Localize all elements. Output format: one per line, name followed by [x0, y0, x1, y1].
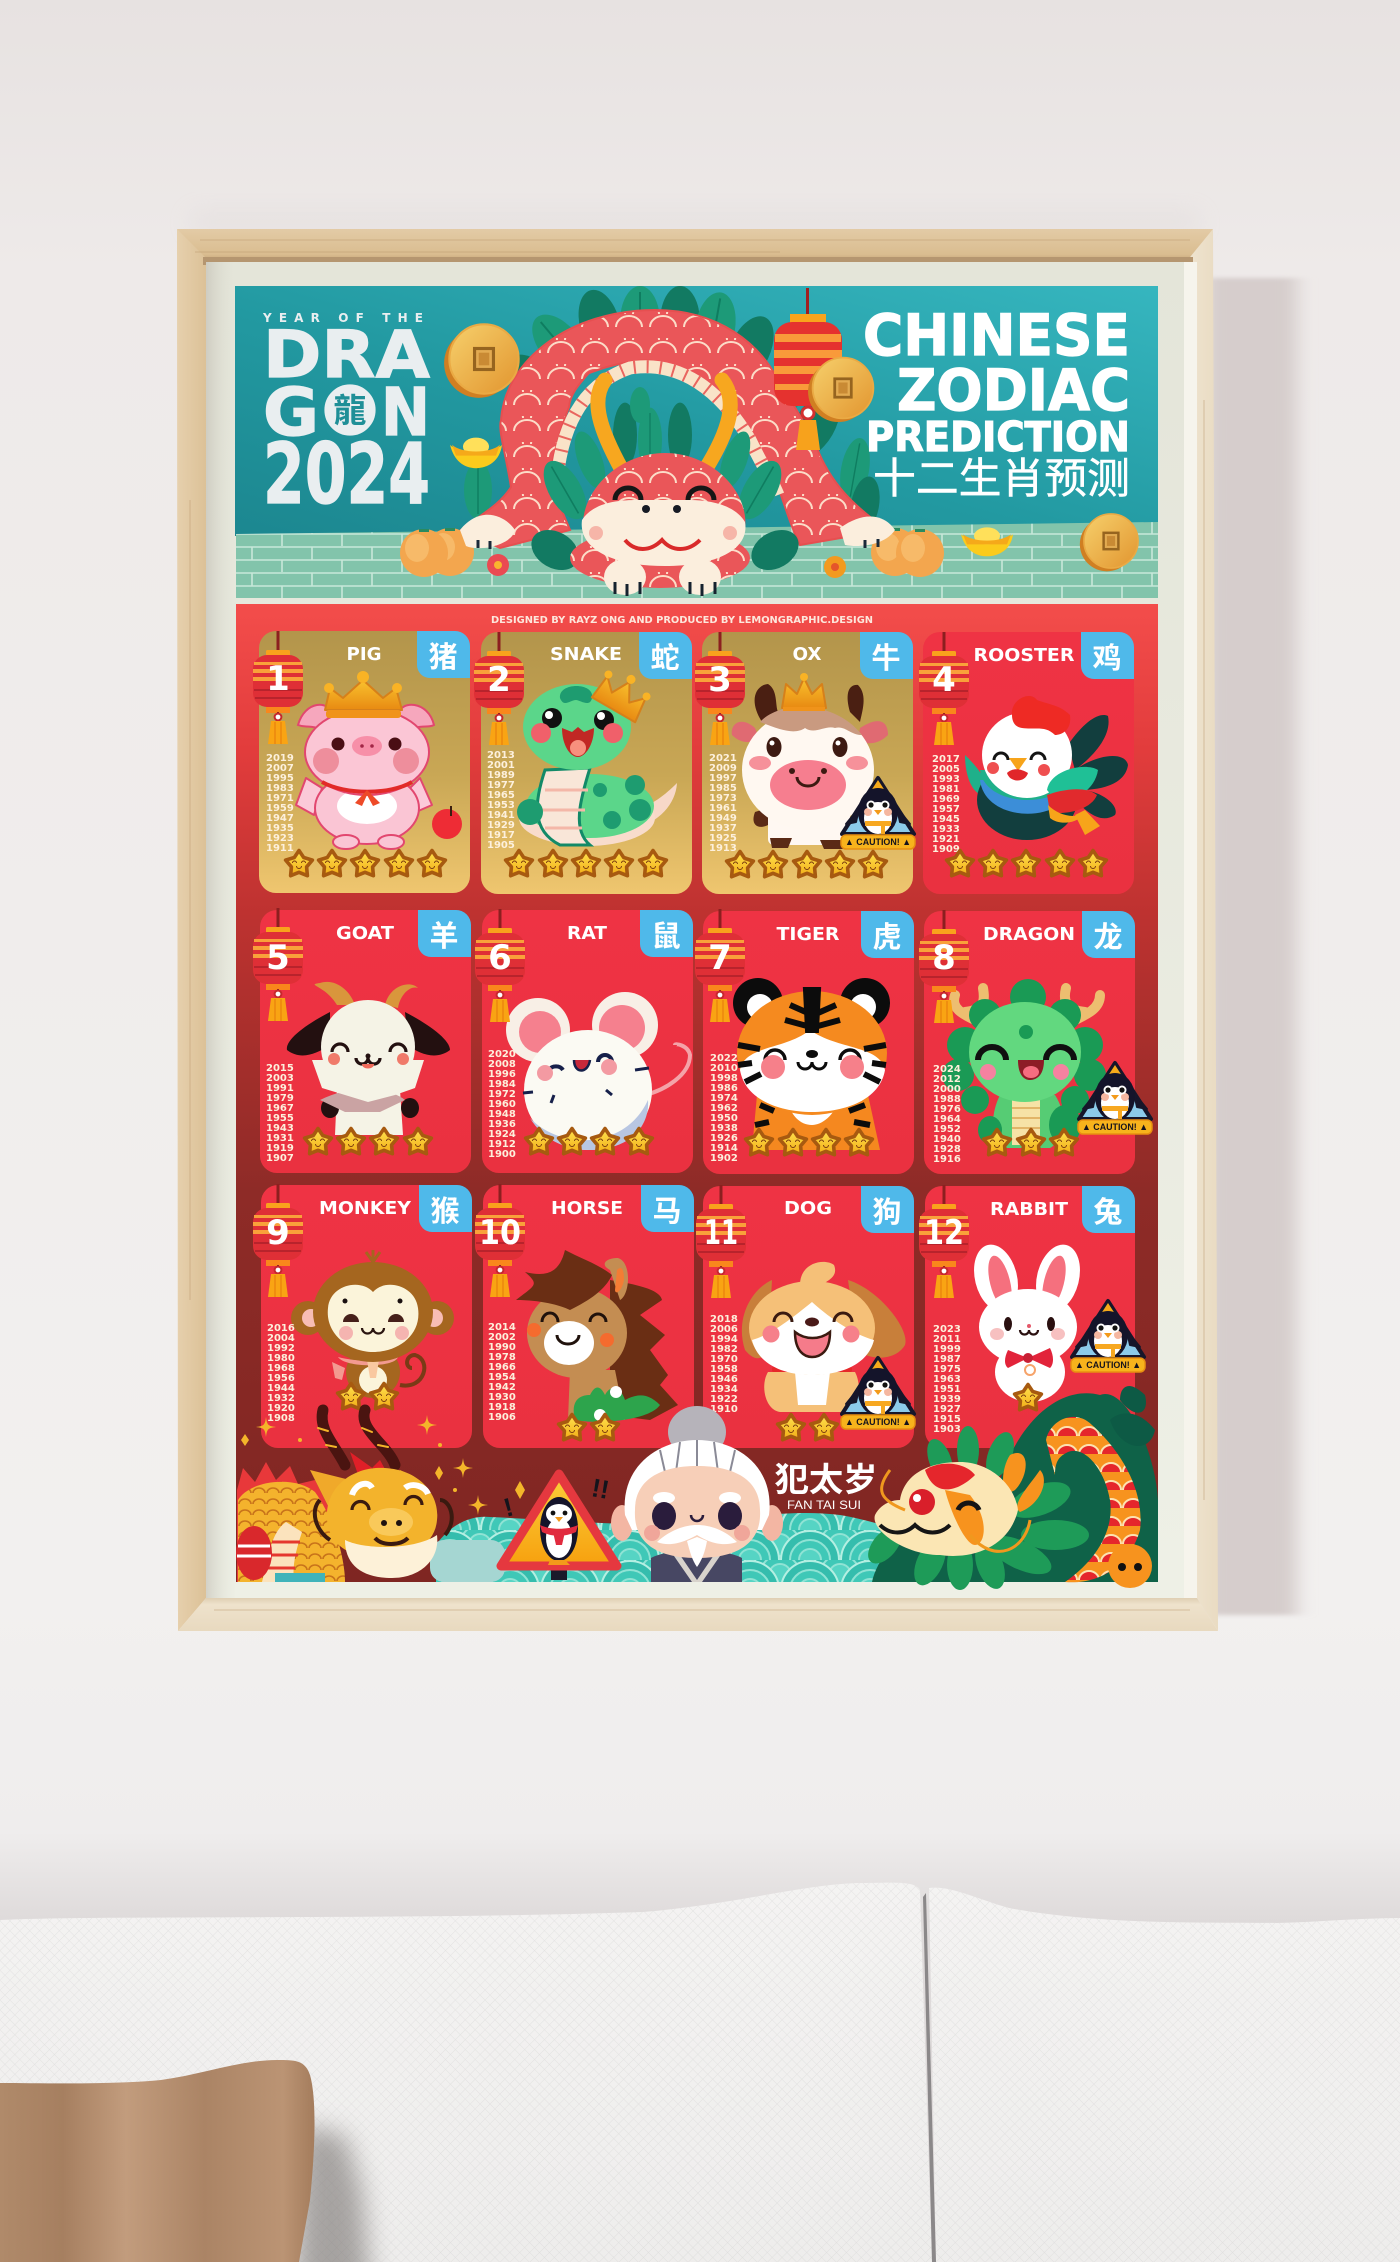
panel: pig card: [253, 631, 470, 893]
birth years: 1994: [710, 1334, 738, 1345]
birth years: 1930: [488, 1392, 516, 1403]
birth years: 1927: [933, 1404, 961, 1415]
birth years: 1941: [487, 810, 515, 821]
birth years: 1996: [488, 1069, 516, 1080]
birth years: 1968: [267, 1363, 295, 1374]
birth years: 1925: [709, 833, 737, 844]
lantern number: 3: [708, 660, 732, 700]
birth years: 1967: [266, 1103, 294, 1114]
birth years: 1966: [488, 1362, 516, 1373]
oranges right: [871, 528, 944, 577]
birth years: 1914: [710, 1143, 738, 1154]
cloud swirl: [430, 1540, 505, 1582]
birth years: 2012: [933, 1074, 961, 1085]
birth years: 1951: [933, 1384, 961, 1395]
birth years: 1949: [709, 813, 737, 824]
lantern number: [253, 1184, 303, 1297]
birth years: 1921: [932, 834, 960, 845]
birth years: 1977: [487, 780, 515, 791]
panel: goat card: [253, 908, 471, 1173]
panel: dragon card: [919, 910, 1152, 1174]
birth years: 2007: [266, 763, 294, 774]
birth years: 2024: [933, 1064, 961, 1075]
flowers: [487, 554, 846, 578]
birth years: 1962: [710, 1103, 738, 1114]
goat: [287, 982, 450, 1135]
panel: rat card: [475, 909, 693, 1173]
oranges left: [400, 528, 474, 577]
warning sign with penguin: [501, 1474, 617, 1580]
title: chinese zodiac prediction: CHINESE: [863, 303, 1130, 369]
birth years: 1931: [266, 1133, 294, 1144]
ocean waves: [436, 1513, 940, 1582]
coin 3: [1080, 514, 1138, 571]
panel: dragon card: 龙: [1093, 921, 1123, 954]
birth years: 2018: [710, 1314, 738, 1325]
birth years: 1965: [487, 790, 515, 801]
birth years: 1986: [710, 1083, 738, 1094]
star rating: [286, 850, 445, 876]
panel: rabbit card: 兔: [1093, 1196, 1123, 1229]
birth years: 1987: [933, 1354, 961, 1365]
birth years: 1935: [266, 823, 294, 834]
lantern number: 2: [487, 660, 511, 700]
panel: dog card: 狗: [872, 1196, 902, 1229]
gold sparkles: [241, 1415, 525, 1515]
birth years: 1922: [710, 1394, 738, 1405]
birth years: 1909: [932, 844, 960, 855]
rooster: [965, 696, 1128, 840]
birth years: 1908: [267, 1413, 295, 1424]
birth years: 1971: [266, 793, 294, 804]
wooden frame: [177, 229, 1218, 1631]
panel: ox card: 牛: [871, 642, 901, 675]
birth years: 1960: [488, 1099, 516, 1110]
gold ingot right: [961, 527, 1013, 556]
birth years: 2011: [933, 1334, 961, 1345]
star rating: [1015, 1384, 1041, 1410]
panel: rabbit card: RABBIT: [990, 1199, 1069, 1220]
birth years: 1993: [932, 774, 960, 785]
left cushion: [0, 1883, 932, 2262]
birth years: 1973: [709, 793, 737, 804]
snake: [517, 663, 677, 846]
lantern number: [253, 908, 303, 1021]
birth years: 1906: [488, 1412, 516, 1423]
panel: snake card: 蛇: [650, 642, 680, 675]
coin 2: [808, 358, 873, 422]
lantern number: [253, 631, 303, 744]
panel: pig card: PIG: [346, 644, 382, 665]
frame shadow on wall: [190, 212, 1297, 1615]
birth years: 2002: [488, 1332, 516, 1343]
pig: [296, 671, 462, 849]
fan tai sui scene: [236, 1386, 1158, 1593]
caution penguin: [841, 1358, 915, 1429]
panel: rooster card: 鸡: [1092, 642, 1122, 675]
panel: horse card: [475, 1184, 694, 1448]
hero banner: [235, 285, 1158, 598]
green dragon: [942, 979, 1106, 1148]
lantern number: 1: [266, 659, 290, 699]
birth years: 1995: [266, 773, 294, 784]
title: chinese zodiac prediction: PREDICTION: [866, 413, 1130, 461]
birth years: 1981: [932, 784, 960, 795]
rat: [506, 992, 690, 1150]
red panel background: [236, 604, 1158, 1582]
lantern number: [919, 1185, 969, 1298]
birth years: 1958: [710, 1364, 738, 1375]
birth years: 1937: [709, 823, 737, 834]
birth years: 1982: [710, 1344, 738, 1355]
lantern number: [696, 1185, 746, 1298]
star rating: [746, 1130, 872, 1155]
birth years: 1918: [488, 1402, 516, 1413]
title: year of the dragon 2024: YEAR OF THE: [262, 311, 427, 325]
panel: tiger card: TIGER: [776, 924, 840, 945]
birth years: 1932: [267, 1393, 295, 1404]
birth years: 1900: [488, 1149, 516, 1160]
right dragon: [862, 1386, 1158, 1593]
birth years: 2015: [266, 1063, 294, 1074]
birth years: 1990: [488, 1342, 516, 1353]
birth years: 1964: [933, 1114, 961, 1125]
birth years: 1992: [267, 1343, 295, 1354]
poster: [235, 285, 1158, 1593]
panel: snake card: SNAKE: [550, 644, 622, 665]
dragon head: [582, 453, 745, 566]
birth years: 1985: [709, 783, 737, 794]
birth years: 1997: [709, 773, 737, 784]
birth years: 1946: [710, 1374, 738, 1385]
horse: [516, 1250, 678, 1422]
exclamation marks: !!: [589, 1472, 612, 1505]
birth years: 1933: [932, 824, 960, 835]
lantern number: 4: [932, 660, 956, 700]
panel: dog card: [696, 1185, 915, 1448]
birth years: 1911: [266, 843, 294, 854]
star rating: [305, 1128, 431, 1154]
lantern number: [474, 632, 524, 745]
exclamation marks: [500, 1472, 612, 1523]
panel: rat card: 鼠: [651, 920, 681, 953]
birth years: 1940: [933, 1134, 961, 1145]
panel: monkey card: [253, 1184, 472, 1448]
birth years: 1943: [266, 1123, 294, 1134]
birth years: 2006: [710, 1324, 738, 1335]
panel: tiger card: 虎: [872, 921, 902, 954]
hanging lantern: [774, 288, 842, 450]
panel: monkey card: MONKEY: [319, 1198, 412, 1219]
birth years: 2005: [932, 764, 960, 775]
birth years: 1974: [710, 1093, 738, 1104]
birth years: 1912: [488, 1139, 516, 1150]
birth years: 1983: [266, 783, 294, 794]
birth years: 1917: [487, 830, 515, 841]
birth years: 1924: [488, 1129, 516, 1140]
heading: fan tai sui: FAN TAI SUI: [787, 1498, 861, 1512]
lantern number: [919, 632, 969, 745]
birth years: 1959: [266, 803, 294, 814]
birth years: 1969: [932, 794, 960, 805]
birth years: 1913: [709, 843, 737, 854]
dragon head side leaves: [524, 428, 806, 578]
birth years: 1934: [710, 1384, 738, 1395]
birth years: 1942: [488, 1382, 516, 1393]
birth years: 2020: [488, 1049, 516, 1060]
birth years: 2017: [932, 754, 960, 765]
lantern number: [695, 632, 745, 745]
heading: fan tai sui: [774, 1461, 878, 1512]
lantern number: 7: [708, 938, 732, 978]
coin 1: [444, 324, 519, 398]
birth years: 2019: [266, 753, 294, 764]
birth years: 1980: [267, 1353, 295, 1364]
birth years: 2010: [710, 1063, 738, 1074]
birth years: 1903: [933, 1424, 961, 1435]
lantern number: [475, 909, 525, 1022]
birth years: 1952: [933, 1124, 961, 1135]
birth years: 1905: [487, 840, 515, 851]
dragon crest leaves: [464, 285, 884, 536]
birth years: 1950: [710, 1113, 738, 1124]
tiled floor: [236, 522, 1158, 598]
caution penguin: [1078, 1063, 1152, 1134]
panel: rat card: RAT: [567, 923, 608, 944]
lantern number: 9: [266, 1213, 290, 1253]
panel: ox card: [695, 632, 915, 894]
birth years: 1928: [933, 1144, 961, 1155]
star rating: [526, 1128, 652, 1154]
panel: monkey card: 猴: [430, 1195, 460, 1228]
birth years: 2021: [709, 753, 737, 764]
dragon lower body: [570, 528, 750, 588]
birth years: 1955: [266, 1113, 294, 1124]
title: chinese zodiac prediction: [863, 303, 1130, 502]
panel: pig card: 猪: [428, 641, 458, 674]
panel: rooster card: ROOSTER: [974, 645, 1075, 666]
birth years: 2014: [488, 1322, 516, 1333]
title: year of the dragon 2024: [262, 311, 430, 523]
birth years: 1916: [933, 1154, 961, 1165]
birth years: 1961: [709, 803, 737, 814]
birth years: 2003: [266, 1073, 294, 1084]
lantern number: 11: [704, 1213, 738, 1253]
dog: [742, 1262, 906, 1412]
birth years: 1989: [487, 770, 515, 781]
star rating: [727, 852, 886, 877]
star rating: [559, 1414, 618, 1440]
birth years: 1948: [488, 1109, 516, 1120]
birth years: 2016: [267, 1323, 295, 1334]
old man tai sui: [611, 1406, 783, 1582]
sofa: [0, 1883, 1400, 2262]
lantern number: [695, 909, 745, 1022]
birth years: 1929: [487, 820, 515, 831]
title: year of the dragon 2024: G: [263, 374, 319, 451]
star rating: [984, 1130, 1077, 1155]
star rating: [947, 850, 1106, 876]
birth years: 1945: [932, 814, 960, 825]
lantern number: [475, 1184, 525, 1297]
panel: ox card: OX: [792, 644, 822, 665]
caution penguin: [1071, 1301, 1145, 1372]
birth years: 1947: [266, 813, 294, 824]
monkey: [291, 1250, 454, 1398]
birth years: 1978: [488, 1352, 516, 1363]
birth years: 1963: [933, 1374, 961, 1385]
panel: dog card: DOG: [784, 1198, 832, 1219]
rabbit: [967, 1240, 1087, 1402]
birth years: 1954: [488, 1372, 516, 1383]
birth years: 1944: [267, 1383, 295, 1394]
birth years: 1988: [933, 1094, 961, 1105]
birth years: 1926: [710, 1133, 738, 1144]
lantern number: 6: [488, 938, 512, 978]
birth years: 2000: [933, 1084, 961, 1095]
birth years: 1923: [266, 833, 294, 844]
birth years: 2008: [488, 1059, 516, 1070]
title: year of the dragon 2024: 龍: [334, 392, 366, 429]
birth years: 2001: [487, 760, 515, 771]
credit line: DESIGNED BY RAYZ ONG AND PRODUCED BY LEMONGRAPHIC.DESIGN: [491, 615, 873, 626]
tiger: [733, 978, 890, 1150]
dragon front paws at sides: [460, 515, 895, 549]
panel: dragon card: DRAGON: [983, 924, 1075, 945]
birth years: 1907: [266, 1153, 294, 1164]
panel: goat card: 羊: [429, 920, 459, 953]
lantern number: 10: [479, 1213, 521, 1253]
gold dragon: [236, 1410, 452, 1582]
ox: [732, 673, 888, 849]
heading: fan tai sui: 犯太岁: [774, 1461, 878, 1498]
birth years: 1970: [710, 1354, 738, 1365]
birth years: 1998: [710, 1073, 738, 1084]
birth years: 2004: [267, 1333, 295, 1344]
birth years: 1953: [487, 800, 515, 811]
lantern number: [919, 910, 969, 1023]
panel: snake card: [474, 632, 692, 894]
leather pillow: [0, 2060, 315, 2262]
panel: tiger card: [695, 909, 914, 1174]
birth years: 1902: [710, 1153, 738, 1164]
panel: rooster card: [919, 632, 1134, 894]
gold ingot left: [450, 438, 502, 468]
star rating: [506, 850, 666, 876]
birth years: 1976: [933, 1104, 961, 1115]
inner belly stripe: [556, 367, 778, 495]
right cushion: [929, 1888, 1400, 2262]
title: year of the dragon 2024: DRA: [263, 318, 430, 393]
birth years: 1984: [488, 1079, 516, 1090]
lantern number: 12: [924, 1213, 964, 1253]
birth years: 1915: [933, 1414, 961, 1425]
pillow shadow: [295, 2125, 372, 2262]
dragon body arch: [461, 310, 887, 548]
title: chinese zodiac prediction: 十二生肖预测: [873, 455, 1130, 502]
birth years: 1957: [932, 804, 960, 815]
dragon antlers: [598, 380, 730, 470]
lantern number: 8: [932, 938, 956, 978]
dragon front claws: [604, 559, 721, 596]
birth years: 2023: [933, 1324, 961, 1335]
star rating: [338, 1384, 397, 1409]
star rating: [778, 1414, 837, 1440]
panel: rabbit card: [919, 1185, 1145, 1448]
inner leaves: [613, 387, 692, 472]
birth years: 1936: [488, 1119, 516, 1130]
panel: horse card: 马: [652, 1196, 682, 1228]
birth years: 2022: [710, 1053, 738, 1064]
birth years: 1920: [267, 1403, 295, 1414]
birth years: 1956: [267, 1373, 295, 1384]
birth years: 2013: [487, 750, 515, 761]
title: year of the dragon 2024: 2024: [263, 425, 430, 523]
birth years: 1919: [266, 1143, 294, 1154]
panel: horse card: HORSE: [551, 1198, 623, 1219]
panel: goat card: GOAT: [336, 923, 395, 944]
title: chinese zodiac prediction: ZODIAC: [897, 358, 1130, 424]
birth years: 1939: [933, 1394, 961, 1405]
exclamation marks: !: [500, 1492, 516, 1523]
lantern number: 5: [266, 938, 290, 978]
birth years: 1972: [488, 1089, 516, 1100]
caution penguin: [841, 778, 915, 849]
birth years: 1910: [710, 1404, 738, 1415]
birth years: 1938: [710, 1123, 738, 1134]
birth years: 1975: [933, 1364, 961, 1375]
birth years: 1999: [933, 1344, 961, 1355]
birth years: 1991: [266, 1083, 294, 1094]
title: year of the dragon 2024: N: [381, 374, 430, 451]
birth years: 2009: [709, 763, 737, 774]
birth years: 1979: [266, 1093, 294, 1104]
